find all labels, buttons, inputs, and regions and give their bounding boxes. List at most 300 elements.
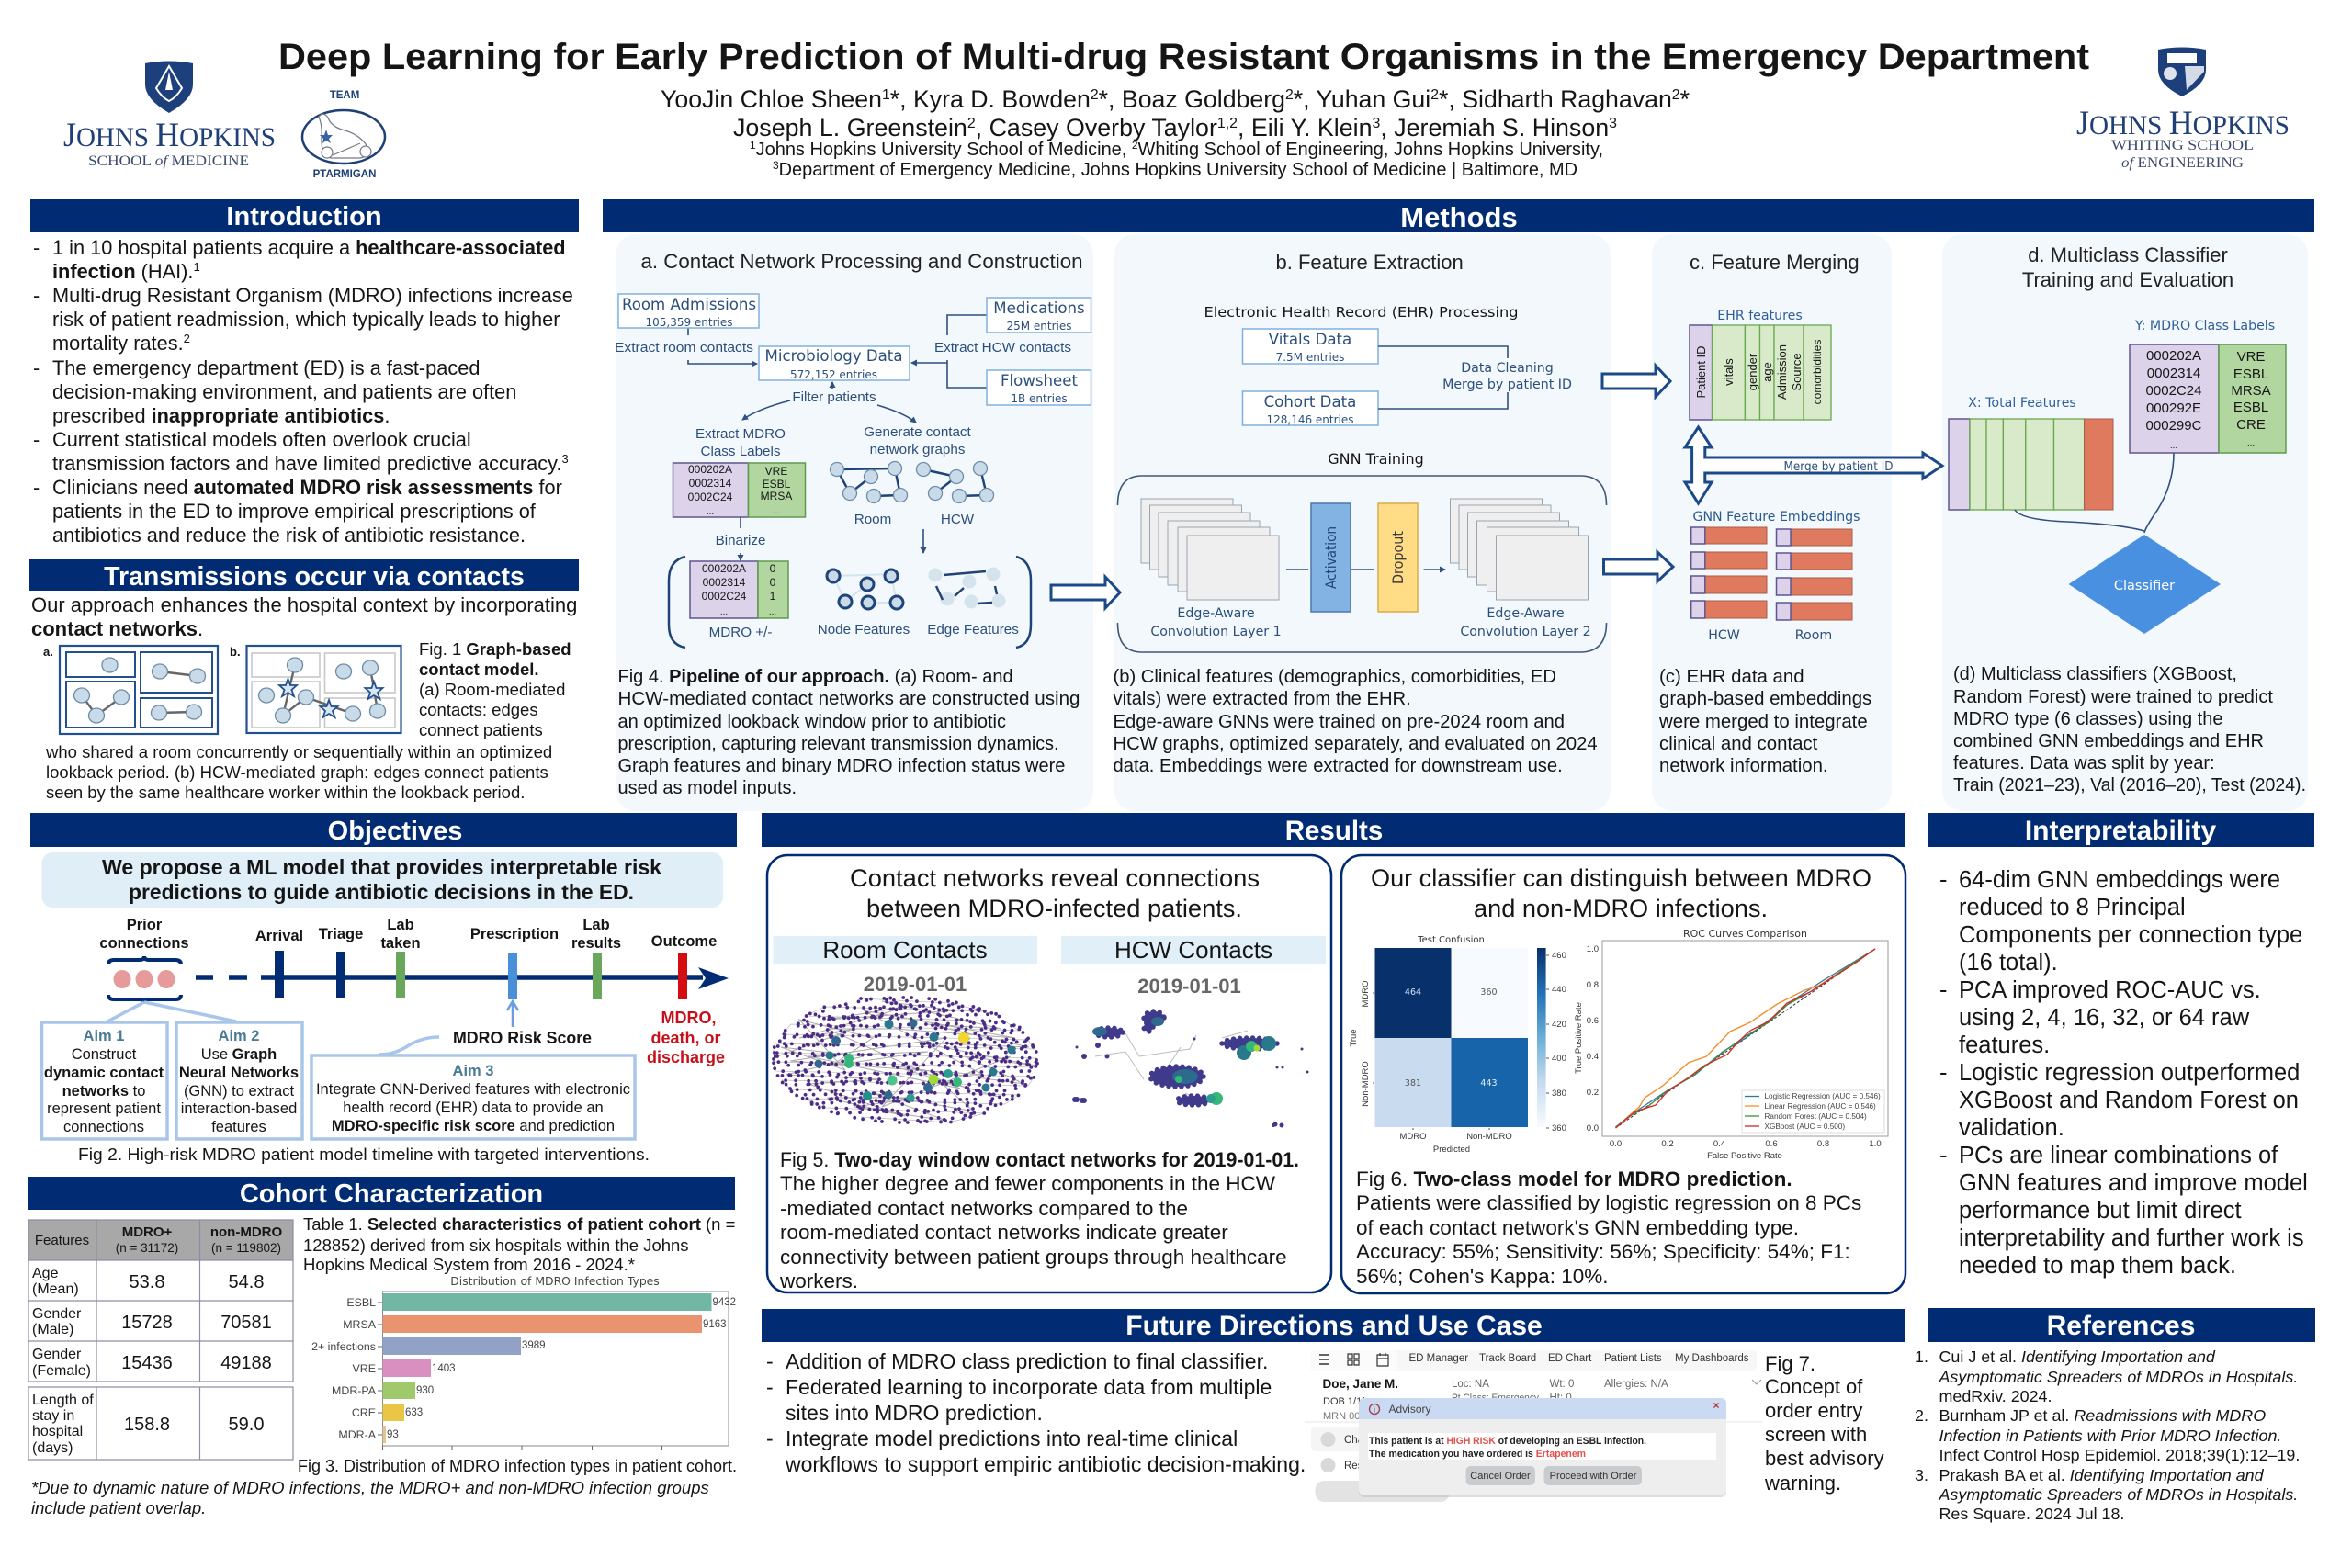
box: aim 1: connections (63, 1119, 144, 1135)
screenshot: order entry: Doe, Jane M. (1323, 1377, 1398, 1391)
text block: introduction bullets: antibiotics and reduce the risk of antibiotic resistance. (52, 524, 526, 547)
caption: figure 6: of each contact network's GNN embedding type. (1356, 1216, 1799, 1239)
GNN architecture: Activation (1322, 526, 1340, 589)
heading: transmissions occur via contacts: Transmissions occur via contacts (104, 562, 525, 592)
figure 1a: room-mediated graph (43, 645, 218, 734)
authors and affiliations: Department of Emergency Medicine, Johns Hopkins University School of Medicine | Baltimore, MD (779, 160, 1577, 180)
table 1: Features (35, 1233, 89, 1248)
data source boxes (618, 294, 1091, 405)
table: Y labels: ESBL (2233, 367, 2268, 382)
text block: interpretability bullets: - (1939, 977, 1948, 1003)
chart: confusion matrix: 360 (1552, 1123, 1566, 1134)
merge arrow (1685, 427, 1942, 503)
logo: Johns Hopkins Whiting School of Engineering: of ENGINEERING (2121, 155, 2244, 171)
chart: confusion matrix: 420 (1552, 1020, 1566, 1030)
subheading: HCW contacts (1061, 936, 1326, 964)
table 1 caption (303, 1214, 735, 1274)
screenshot: order entry: MRN 00 (1323, 1411, 1360, 1422)
box: aim 3 (311, 1055, 635, 1139)
chart: confusion matrix: Test Confusion (1417, 935, 1485, 945)
text block: interpretability bullets: needed to map them back. (1959, 1253, 2236, 1279)
caption: panel c: graph-based embeddings (1659, 689, 1871, 709)
timeline: Prescription (470, 926, 559, 942)
data source boxes: Room Admissions (622, 296, 756, 313)
table 1: non-MDRO (210, 1224, 282, 1240)
timeline: taken (380, 935, 421, 952)
data source boxes: 105,359 entries (645, 316, 733, 329)
caption: figure 5 (779, 1148, 1299, 1292)
caption: figure 5: The higher degree and fewer components in the HCW (780, 1172, 1276, 1195)
text block: interpretability bullets: Logistic regression outperformed (1959, 1060, 2300, 1086)
table: class labels: ... (707, 507, 714, 517)
table 1: MDRO+ (122, 1224, 173, 1240)
box: aim 3: Aim 3 (453, 1063, 493, 1079)
caption: panel c: were merged to integrate (1658, 712, 1868, 732)
caption: figure 5: room-mediated contact networks indicate greater (780, 1221, 1228, 1244)
table 1 (28, 1220, 293, 1460)
embeddings: room: Room (1795, 628, 1832, 643)
box: aim 2: interaction-based (181, 1100, 297, 1117)
caption: figure 4: Fig 4. Pipeline of our approach. (a) Room- and (617, 667, 1013, 687)
result card: contact networks (767, 855, 1331, 1292)
screenshot: order entry: ED Chart (1548, 1353, 1592, 1364)
caption: figure 5: workers. (779, 1269, 858, 1292)
table 1: (Mean) (32, 1281, 79, 1297)
panel: methods (603, 199, 2314, 811)
process labels: MDRO +/- (709, 625, 772, 640)
embeddings: HCW: HCW (1708, 628, 1740, 643)
caption: figure 5: Fig 5. Two-day window contact networks for 2019-01-01. (780, 1148, 1299, 1171)
bar chart: distribution of MDRO infection types: MDR-PA (332, 1384, 377, 1397)
dialog: advisory warning: × (1713, 1399, 1720, 1412)
screenshot: order entry: Allergies: N/A (1604, 1379, 1668, 1390)
text block: references (1915, 1348, 2300, 1523)
table: Y labels: 000292E (2146, 400, 2201, 416)
chart: ROC curves: 0.0 (1587, 1123, 1599, 1134)
caption: panel d: Random Forest) were trained to predict (1953, 687, 2273, 707)
screenshot: order entry: Wt: 0 (1549, 1379, 1574, 1390)
text block: future directions: Federated learning to incorporate data from multiple (786, 1375, 1272, 1399)
chart legend: Logistic Regression (AUC = 0.546) (1764, 1092, 1881, 1100)
caption: figure 6: Accuracy: 55%; Sensitivity: 56%; Specificity: 54%; F1: (1356, 1240, 1850, 1263)
figure 1b: HCW-mediated graph: b. (230, 645, 241, 659)
data source boxes: 572,152 entries (790, 368, 877, 381)
panel c: feature merging (1652, 234, 1892, 811)
data source boxes: Medications (993, 299, 1085, 317)
EHR data boxes (1242, 329, 1572, 426)
process labels: Node Features (818, 622, 910, 637)
text block: approach: contact networks. (31, 617, 203, 640)
chart: ROC curves: True Positive Rate (1574, 1002, 1584, 1074)
table: binarized labels: 0002314 (703, 576, 746, 589)
chart: confusion matrix: 400 (1552, 1054, 1566, 1064)
authors and affiliations: , Casey Overby Taylor (976, 114, 1217, 141)
chart: ROC curves: 1.0 (1587, 944, 1599, 954)
screenshot: order entry: DOB 1/1/ (1323, 1396, 1365, 1407)
box: aim 1: represent patient (47, 1100, 161, 1117)
text block: references: Cui J et al. Identifying Importation and (1939, 1348, 2216, 1366)
table 1: (Female) (32, 1363, 91, 1379)
table 1: (days) (32, 1440, 73, 1456)
table: binarized labels: 0 (770, 562, 776, 575)
table 1: 54.8 (229, 1272, 264, 1292)
figure 1b: HCW-mediated graph (230, 645, 401, 733)
classifier diamond (2069, 535, 2221, 634)
label: MDRO risk score (379, 1001, 592, 1055)
EHR feature table (1690, 325, 1831, 420)
label: outcome: MDRO, (662, 1009, 717, 1027)
heading: results: Results (1285, 816, 1383, 846)
classifier diamond: Classifier (2114, 579, 2175, 593)
panel: results (762, 813, 1905, 1293)
table 1: (Male) (32, 1322, 74, 1337)
text block: interpretability bullets: GNN features and improve model (1959, 1170, 2308, 1196)
text block: interpretability bullets: validation. (1959, 1115, 2064, 1141)
dialog: advisory warning (1359, 1398, 1726, 1497)
result card: classifier: Our classifier can distinguish between MDRO (1371, 864, 1871, 892)
EHR feature table: Admission (1775, 344, 1789, 400)
subheading: room contacts: Room Contacts (822, 936, 988, 964)
table 1: Gender (32, 1306, 82, 1322)
merge arrow: Merge by patient ID (1784, 460, 1893, 474)
figure 1 caption: seen by the same healthcare worker within the lookback period. (46, 783, 525, 802)
authors and affiliations: *, Sidharth Raghavan (1439, 85, 1672, 113)
box: aim 3: Integrate GNN-Derived features with electronic (316, 1081, 630, 1098)
screenshot: order entry: Res (1344, 1461, 1363, 1472)
data source boxes: 25M entries (1006, 320, 1072, 333)
text block: introduction bullets: - (33, 236, 40, 259)
figure 1a: room-mediated graph: a. (43, 645, 53, 659)
authors and affiliations: 2 (967, 116, 976, 131)
table 1: 53.8 (130, 1272, 164, 1292)
text block: interpretability bullets: PCA improved ROC-AUC vs. (1959, 977, 2261, 1003)
table: Y labels: 0002314 (2147, 366, 2200, 381)
caption: figure 7: best advisory (1765, 1447, 1884, 1470)
caption: figure 7: warning. (1764, 1472, 1841, 1495)
caption: figure 6: Fig 6. Two-class model for MDRO prediction. (1356, 1168, 1792, 1190)
EHR feature table: gender (1746, 353, 1759, 390)
caption: panel d: combined GNN embeddings and EHR (1953, 731, 2264, 751)
box: aim 1: Construct (72, 1046, 137, 1063)
caption: figure 7: order entry (1765, 1399, 1862, 1422)
chart: confusion matrix: 443 (1480, 1078, 1498, 1089)
figure 1 caption: contacts: edges (419, 700, 538, 719)
table: binarized labels: 0002C24 (702, 590, 747, 603)
text block: references: Burnham JP et al. Readmissions with MDRO (1939, 1406, 2266, 1425)
chart: ROC curves: 0.8 (1587, 980, 1599, 990)
chart: confusion matrix: Predicted (1433, 1145, 1470, 1155)
timeline: results (571, 935, 621, 952)
chart: ROC curves: ROC Curves Comparison (1683, 928, 1807, 940)
table: binarized labels: 000202A (702, 562, 746, 575)
panel b: feature extraction: Electronic Health Record (EHR) Processing (1204, 304, 1518, 321)
text block: future directions: sites into MDRO prediction. (786, 1401, 1043, 1425)
caption: figure 7: Concept of (1765, 1375, 1863, 1398)
text block: references: Prakash BA et al. Identifying Importation and (1939, 1466, 2265, 1484)
panel: references (1915, 1308, 2315, 1523)
caption: panel b: vitals) were extracted from the EHR. (1114, 689, 1411, 709)
timeline: connections (99, 935, 189, 952)
text block: approach: Our approach enhances the hospital context by incorporating (31, 593, 577, 616)
text block: approach (31, 593, 577, 640)
figure 1 caption: who shared a room concurrently or sequentially within an optimized (45, 742, 552, 761)
table 1: 158.8 (124, 1415, 170, 1435)
bar chart: distribution of MDRO infection types: 633 (405, 1407, 423, 1418)
bar chart: distribution of MDRO infection types: MDR-A (338, 1428, 377, 1441)
footnote: *Due to dynamic nature of MDRO infections, the MDRO+ and non-MDRO infection groups (31, 1478, 709, 1497)
heading: methods (603, 199, 2314, 233)
text block: references: Asymptomatic Spreaders of MDROs in Hospitals. (1939, 1368, 2298, 1386)
connector lines (688, 315, 987, 560)
process labels: Extract room contacts (615, 340, 753, 355)
chart: confusion matrix: True (1349, 1029, 1359, 1047)
caption: panel c (1658, 667, 1871, 776)
bar chart: distribution of MDRO infection types: 1403 (432, 1363, 456, 1374)
text block: references: medRxiv. 2024. (1939, 1387, 2052, 1405)
authors and affiliations: Johns Hopkins University School of Medicine, (756, 140, 1132, 160)
text block: introduction bullets: infection (HAI). (52, 260, 193, 283)
table: binarized labels: ... (720, 607, 728, 617)
text block: interpretability bullets: 64-dim GNN embeddings were (1959, 867, 2280, 893)
box: aim 2: Aim 2 (219, 1028, 259, 1044)
logo: Johns Hopkins Whiting School of Engineering: WHITING SCHOOL (2111, 138, 2254, 153)
callout: model proposal (42, 852, 723, 908)
chart: ROC curves: 1.0 (1869, 1139, 1882, 1149)
embeddings: room (1777, 529, 1852, 643)
text block: references: Infection in Patients with Prior MDRO Infection. (1939, 1427, 2281, 1445)
caption: figure 4: HCW-mediated contact networks are constructed using (617, 689, 1080, 709)
text block: future directions (766, 1349, 1306, 1476)
bar chart: distribution of MDRO infection types: VRE (353, 1362, 376, 1375)
figure 1 caption: Fig. 1 Graph-based (419, 639, 571, 659)
table: X features (1949, 419, 2113, 510)
chart: confusion matrix: MDRO (1399, 1132, 1427, 1142)
caption: panel b: data. Embeddings were extracted for downstream use. (1114, 756, 1563, 776)
panel b: feature extraction (1114, 234, 1611, 811)
text block: references: 2. (1915, 1406, 1928, 1425)
table: class labels: 0002314 (689, 477, 732, 490)
logo: Johns Hopkins Whiting School of Engineering: JOHNS HOPKINS (2076, 105, 2290, 142)
panel d: classifier: Y: MDRO Class Labels (2134, 319, 2275, 333)
panel: introduction (30, 199, 579, 547)
heading: objectives: Objectives (328, 817, 462, 846)
chart: confusion matrix: 440 (1552, 985, 1566, 995)
panel b: feature extraction: GNN Training (1328, 450, 1424, 468)
EHR data boxes: 128,146 entries (1266, 413, 1354, 426)
caption: panel d: (d) Multiclass classifiers (XGBoost, (1953, 664, 2237, 684)
label: MDRO risk score: MDRO Risk Score (453, 1029, 592, 1047)
bar chart: distribution of MDRO infection types: 9432 (713, 1297, 736, 1308)
panel b: feature extraction: b. Feature Extraction (1275, 251, 1464, 274)
text block: introduction bullets: Clinicians need automated MDRO risk assessments for (52, 476, 562, 499)
text block: references: Asymptomatic Spreaders of MDROs in Hospitals. (1939, 1485, 2298, 1504)
authors and affiliations: 3 (1373, 116, 1380, 131)
text block: introduction bullets: decision-making environment, and patients are often (52, 380, 516, 403)
bar chart: distribution of MDRO infection types: ESBL (346, 1296, 376, 1309)
embeddings: HCW (1691, 527, 1767, 643)
caption: panel d: features. Data was split by year: (1953, 753, 2215, 773)
heading: interpretability (1928, 813, 2314, 847)
caption: panel b: (b) Clinical features (demographics, comorbidities, ED (1114, 667, 1556, 687)
table 1: 15436 (121, 1353, 173, 1373)
graph: node features (827, 570, 903, 609)
heading: references: References (2047, 1311, 2195, 1341)
box: aim 1: Aim 1 (84, 1028, 124, 1044)
bar chart: distribution of MDRO infection types: CRE (352, 1406, 376, 1419)
table 1: 49188 (220, 1353, 272, 1373)
text block: future directions: Integrate model predictions into real-time clinical (786, 1427, 1238, 1450)
caption: panel b: HCW graphs, optimized separately, and evaluated on 2024 (1114, 734, 1598, 754)
heading: cohort characterization: Cohort Characterization (240, 1179, 543, 1209)
text block: future directions: - (766, 1427, 774, 1450)
bar chart: distribution of MDRO infection types: MRSA (343, 1318, 377, 1331)
authors and affiliations: *, Yuhan Gui (1294, 85, 1430, 113)
process labels: HCW (941, 512, 975, 527)
caption: figure 6: 56%; Cohen's Kappa: 10%. (1356, 1265, 1608, 1288)
result card: classifier: and non-MDRO infections. (1474, 895, 1768, 922)
caption: figure 4: used as model inputs. (617, 778, 797, 798)
chart: ROC curves: 0.8 (1817, 1139, 1829, 1149)
callout: model proposal: predictions to guide antibiotic decisions in the ED. (129, 880, 634, 904)
text block: interpretability bullets: - (1939, 1060, 1948, 1086)
logo: Team Ptarmigan: PTARMIGAN (313, 169, 376, 180)
authors and affiliations: 3 (1609, 116, 1617, 131)
panel: interpretability (1928, 813, 2314, 1279)
EHR data boxes: Cohort Data (1264, 393, 1356, 411)
process labels: network graphs (870, 442, 966, 457)
text block: introduction bullets: - (33, 428, 40, 451)
figure 1 caption: lookback period. (b) HCW-mediated graph: edges connect patients (46, 762, 548, 782)
text block: references: 1. (1915, 1348, 1928, 1366)
text block: introduction bullets: - (33, 476, 40, 499)
chart: ROC curves (1574, 928, 1888, 1161)
text block: interpretability bullets: performance but limit direct (1959, 1198, 2242, 1224)
data source boxes: 1B entries (1011, 392, 1068, 405)
logo: Johns Hopkins Whiting School of Engineering (2076, 48, 2290, 171)
authors and affiliations: 1,2 (1217, 116, 1238, 131)
table 1: Age (32, 1266, 59, 1281)
heading: future directions (762, 1309, 1905, 1342)
result card: contact networks: between MDRO-infected patients. (866, 895, 1242, 922)
panel: objectives (30, 813, 737, 1164)
authors and affiliations: 2 (1430, 87, 1439, 103)
bar chart: distribution of MDRO infection types: 9163 (703, 1319, 727, 1330)
caption: figure 4: prescription, capturing relevant transmission dynamics. (617, 734, 1058, 754)
GNN architecture: Dropout (1389, 531, 1407, 584)
screenshot: order entry (1305, 1350, 1762, 1502)
panel c: feature merging: GNN Feature Embeddings (1692, 510, 1860, 525)
text block: interpretability bullets: - (1939, 867, 1948, 893)
box: aim 1 (42, 1022, 167, 1139)
chart: ROC curves: False Positive Rate (1707, 1151, 1782, 1161)
text block: future directions: Addition of MDRO class prediction to final classifier. (786, 1349, 1268, 1373)
text block: references: Infect Control Hosp Epidemiol. 2018;39(1):12–19. (1939, 1446, 2300, 1464)
authors and affiliations: , Jeremiah S. Hinson (1380, 114, 1609, 141)
chart legend: Random Forest (AUC = 0.504) (1764, 1112, 1867, 1121)
bar chart: distribution of MDRO infection types: 2+ infections (311, 1340, 376, 1353)
chart: ROC curves: 0.4 (1587, 1052, 1599, 1062)
figure 1 caption: (a) Room-mediated (419, 680, 565, 699)
heading: introduction (30, 199, 579, 232)
dialog: advisory warning: Advisory (1389, 1403, 1431, 1416)
bar chart: distribution of MDRO infection types: 3989 (522, 1340, 546, 1351)
icon: prior connections (107, 956, 236, 1021)
process labels: Room (854, 512, 891, 527)
table 1: Gender (32, 1347, 82, 1362)
caption: panel c: clinical and contact (1659, 734, 1818, 754)
caption: figure 4 (617, 667, 1080, 798)
result card: contact networks: Contact networks reveal connections (850, 864, 1260, 892)
chart: ROC curves: 0.2 (1587, 1088, 1599, 1098)
panel c: feature merging: EHR features (1717, 309, 1803, 323)
GNN architecture: Edge-Aware (1487, 606, 1565, 621)
table 1 caption: 128852) derived from six hospitals within the Johns (303, 1235, 689, 1255)
result card: classifier (1341, 855, 1905, 1293)
table: Y labels: 000299C (2146, 418, 2202, 434)
logo: Johns Hopkins School of Medicine: JOHNS HOPKINS (63, 117, 276, 154)
footnote (31, 1478, 709, 1517)
text block: interpretability bullets: - (1939, 1143, 1948, 1168)
bar chart: distribution of MDRO infection types (311, 1274, 736, 1450)
table 1: Length of (32, 1393, 94, 1408)
table: class labels: ... (773, 506, 780, 516)
caption: panel b (1114, 667, 1598, 776)
graph: edge features (928, 568, 1005, 608)
table: Y labels: MRSA (2231, 383, 2271, 399)
authors and affiliations: Joseph L. Greenstein (733, 114, 969, 141)
box: aim 2: Use Graph (201, 1046, 277, 1063)
authors and affiliations: , Eili Y. Klein (1238, 114, 1373, 141)
heading: results (762, 813, 1905, 847)
figure 1 caption: contact model. (419, 660, 539, 679)
process labels (615, 340, 1071, 640)
bar chart: distribution of MDRO infection types: 930 (416, 1385, 434, 1396)
screenshot: order entry: Cha (1344, 1435, 1364, 1446)
chart: confusion matrix: Non-MDRO (1466, 1132, 1512, 1142)
dialog: advisory warning: i (1374, 1405, 1375, 1415)
text block: introduction bullets: patients in the ED to improve empirical prescriptions of (52, 500, 537, 523)
panel: future directions (762, 1309, 1905, 1502)
chart: confusion matrix: MDRO (1361, 980, 1371, 1008)
chart: ROC curves: 0.2 (1661, 1139, 1674, 1149)
timeline: Lab (387, 917, 414, 933)
chart: confusion matrix: 380 (1552, 1089, 1566, 1099)
contact graph: HCW (917, 461, 994, 503)
timeline: Arrival (255, 928, 303, 944)
screenshot: order entry: ED Manager (1409, 1353, 1468, 1364)
brackets (669, 557, 1031, 648)
heading: interpretability: Interpretability (2025, 816, 2217, 846)
arrow: a to b (1051, 577, 1120, 608)
data source boxes: Flowsheet (1001, 372, 1078, 389)
logo: Johns Hopkins School of Medicine: SCHOOL of MEDICINE (88, 153, 249, 169)
text block: future directions: - (766, 1375, 774, 1399)
caption: figure 5: connectivity between patient groups through healthcare (780, 1246, 1287, 1269)
caption: figure 6: Patients were classified by logistic regression on 8 PCs (1356, 1191, 1861, 1214)
box: aim 2 (176, 1022, 302, 1139)
text block: introduction bullets: - (33, 284, 40, 307)
figure 1 caption: connect patients (419, 720, 543, 739)
GNN architecture: Convolution Layer 1 (1150, 625, 1282, 639)
text block: interpretability bullets: features. (1959, 1032, 2050, 1058)
panel d: classifier: Training and Evaluation (2022, 268, 2233, 291)
arrow: GNN to embeddings (1604, 552, 1673, 581)
box: aim 3: MDRO-specific risk score and prediction (332, 1118, 615, 1134)
table 1: 15728 (121, 1313, 173, 1333)
chart: ROC curves: 0.4 (1713, 1139, 1725, 1149)
table 1: 59.0 (229, 1415, 264, 1435)
heading: transmissions occur via contacts (29, 559, 579, 592)
